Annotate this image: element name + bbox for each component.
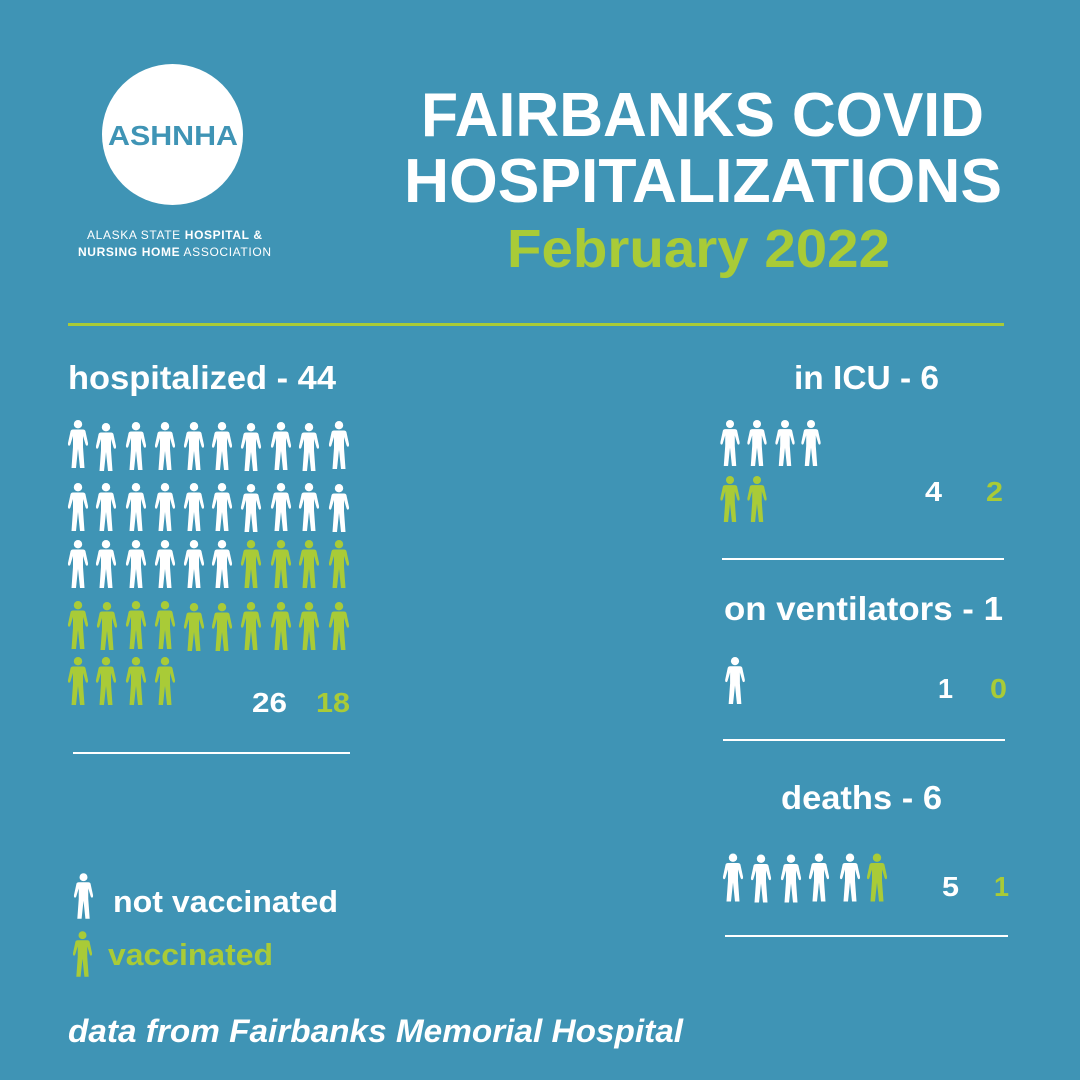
panel: in ICU: 4 <box>925 476 942 507</box>
counts: hospitalized: 18 <box>316 687 350 718</box>
icon: vaccinated <box>73 931 92 977</box>
logo: ASHNHA <box>108 120 238 151</box>
legend <box>73 873 338 977</box>
panel: in ICU: in ICU - 6 <box>794 359 939 396</box>
panel: in ICU <box>720 359 1003 522</box>
panel: in ICU: 2 <box>986 476 1003 507</box>
legend: not vaccinated <box>113 884 338 919</box>
logo <box>78 64 271 259</box>
panel: deaths <box>723 779 1009 902</box>
pictogram: hospitalized 26 unvaccinated, 18 vaccinated <box>68 420 349 705</box>
panel: deaths: 1 <box>994 871 1009 902</box>
panel: on ventilators: 0 <box>990 673 1007 704</box>
logo: ALASKA STATE HOSPITAL & <box>87 228 262 242</box>
heading: hospitalized: hospitalized - 44 <box>68 359 337 396</box>
panel: deaths: deaths - 6 <box>781 779 942 816</box>
legend: vaccinated <box>108 937 273 972</box>
counts: hospitalized <box>252 687 350 718</box>
title: HOSPITALIZATIONS <box>404 147 1002 216</box>
icon: not vaccinated <box>74 873 93 919</box>
panel: on ventilators <box>724 590 1007 704</box>
title: February 2022 <box>507 219 890 279</box>
logo: NURSING HOME ASSOCIATION <box>78 245 271 259</box>
panel: on ventilators: 1 <box>938 673 953 704</box>
panel: deaths: 5 <box>942 871 959 902</box>
source note: data from Fairbanks Memorial Hospital <box>68 1013 684 1049</box>
panel: on ventilators: on ventilators - 1 <box>724 590 1003 627</box>
title: FAIRBANKS COVID <box>421 81 984 150</box>
title <box>404 81 1002 279</box>
counts: hospitalized: 26 <box>252 687 287 718</box>
